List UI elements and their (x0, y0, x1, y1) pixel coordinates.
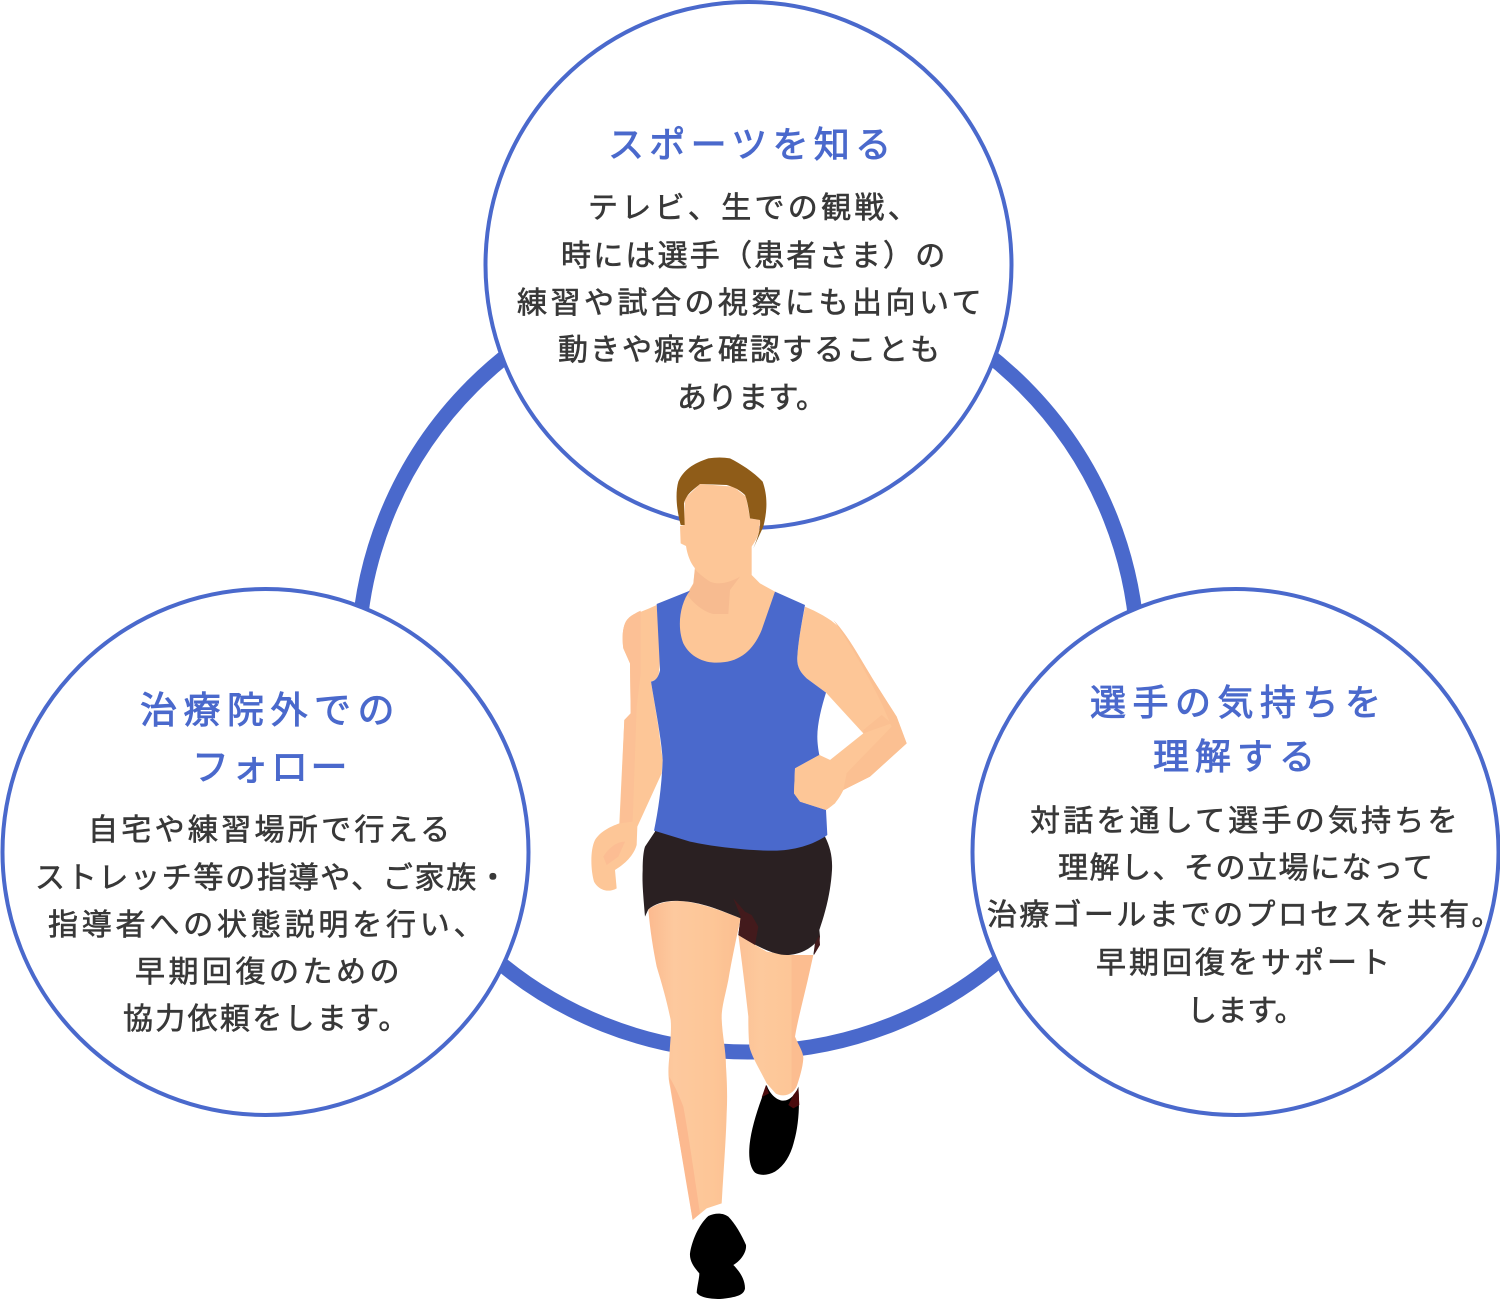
text block: top circle (517, 192, 985, 415)
heading: right circle (1090, 682, 1388, 777)
tank top (651, 591, 827, 851)
hand over tank top (794, 755, 847, 810)
runner figure (591, 457, 907, 1299)
text block: left circle (35, 814, 510, 1036)
text block: left circle: 自宅や練習場所で行える (88, 814, 453, 847)
back leg (738, 935, 813, 1098)
text block: top circle: テレビ、生での観戦、 (588, 192, 921, 225)
back sock (766, 1083, 798, 1102)
text block: top circle: 時には選手（患者さま）の (561, 240, 947, 273)
front leg shadow (669, 1077, 700, 1220)
heading: left circle (140, 690, 401, 788)
heading: right circle: 選手の気持ちを (1090, 682, 1388, 723)
heading: right circle: 理解する (1153, 736, 1321, 777)
panel: top circle, knowing the sport (486, 2, 1012, 528)
back shoe (749, 1085, 799, 1175)
neck shadow (687, 569, 740, 614)
text block: left circle: 協力依頼をします。 (123, 1003, 411, 1036)
text block: left circle: 早期回復のための (135, 956, 403, 989)
arm: viewer left (591, 605, 663, 891)
text block: top circle: 練習や試合の視察にも出向いて (517, 287, 985, 320)
head and chest (675, 484, 775, 670)
shorts (642, 827, 832, 955)
heading: top circle: スポーツを知る (608, 124, 896, 165)
text block: top circle: 動きや癖を確認することも (558, 334, 942, 367)
text block: right circle: 治療ゴールまでのプロセスを共有。 (987, 899, 1500, 932)
text block: right circle (987, 805, 1500, 1028)
front leg (648, 901, 741, 1220)
text block: top circle: あります。 (677, 382, 826, 415)
text block: right circle: します。 (1187, 995, 1305, 1028)
text block: left circle: ストレッチ等の指導や、ご家族・ (35, 862, 510, 895)
upper body (591, 457, 907, 891)
text block: right circle: 対話を通して選手の気持ちを (1030, 805, 1461, 838)
arm: viewer right (794, 607, 907, 810)
heading: left circle: 治療院外での (140, 690, 401, 731)
panel: right circle, understanding the athlete's feelings (972, 589, 1500, 1115)
text block: left circle: 指導者への状態説明を行い、 (48, 909, 487, 942)
front shoe (690, 1214, 746, 1299)
panel: left circle, follow-up outside the clinic (2, 589, 528, 1115)
heading: left circle: フォロー (192, 747, 350, 788)
text block: right circle: 理解し、その立場になって (1058, 852, 1434, 885)
lower body (642, 827, 832, 1299)
large connecting ring (358, 272, 1138, 1052)
text block: right circle: 早期回復をサポート (1096, 947, 1393, 980)
hair (677, 457, 766, 548)
